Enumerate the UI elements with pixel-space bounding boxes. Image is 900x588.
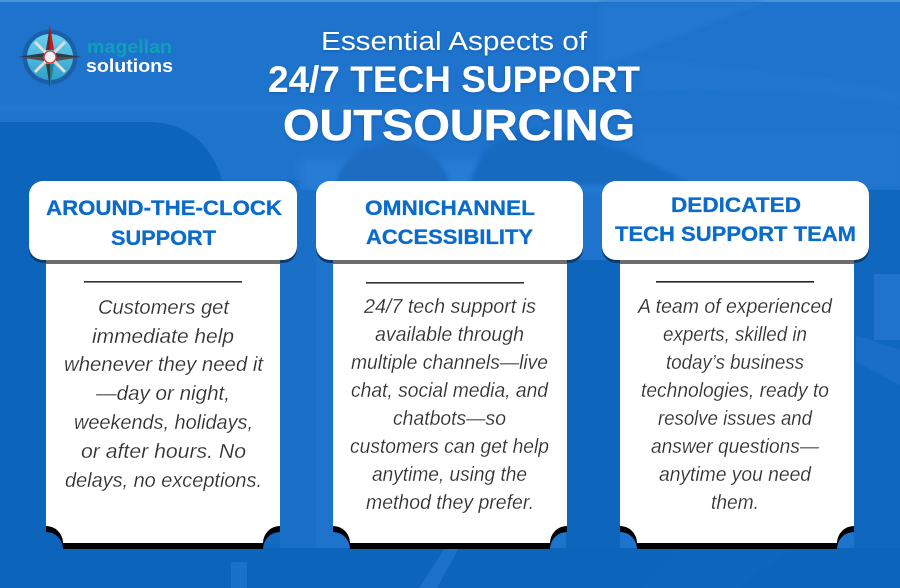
body text: weekends, holidays, — [74, 412, 253, 434]
divider — [656, 281, 814, 283]
heading: OMNICHANNEL — [365, 197, 535, 220]
logo wordmark: magellan — [87, 37, 172, 57]
icon: compass — [18, 25, 82, 88]
panel body — [333, 262, 567, 549]
body text: anytime, using the — [372, 464, 527, 486]
title — [268, 28, 640, 150]
heading: DEDICATED — [671, 194, 801, 217]
body text: Customers get — [98, 297, 230, 319]
body text: multiple channels—live — [351, 352, 548, 374]
logo: Magellan Solutions: solutions — [86, 56, 173, 76]
body text: resolve issues and — [658, 408, 813, 430]
body text: today’s business — [666, 352, 804, 374]
header card — [29, 181, 297, 260]
divider — [84, 281, 242, 283]
panel: omnichannel accessibility — [316, 181, 583, 549]
body text: A team of experienced — [637, 296, 833, 318]
heading: AROUND-THE-CLOCK — [46, 197, 282, 220]
heading: ACCESSIBILITY — [366, 226, 533, 249]
body text: delays, no exceptions. — [65, 470, 262, 492]
body text: available through — [375, 324, 524, 346]
body text: whenever they need it — [64, 354, 264, 376]
header card — [316, 181, 583, 260]
body text: chatbots—so — [393, 408, 506, 430]
body text: 24/7 tech support is — [363, 296, 536, 318]
header shadow — [29, 184, 297, 263]
body text: anytime you need — [659, 464, 812, 486]
body text: technologies, ready to — [641, 380, 829, 402]
body text: them. — [711, 492, 759, 514]
body text: chat, social media, and — [351, 380, 549, 402]
heading: TECH SUPPORT TEAM — [615, 223, 856, 246]
panel: around-the-clock support — [29, 181, 297, 549]
panel body — [46, 262, 280, 549]
body text: immediate help — [92, 326, 234, 348]
body text: answer questions— — [651, 436, 820, 458]
title line 3: OUTSOURCING — [283, 101, 635, 150]
title line 1: Essential Aspects of — [321, 28, 588, 56]
header card — [602, 181, 869, 260]
divider — [366, 282, 524, 284]
heading: SUPPORT — [111, 227, 216, 250]
body text: experts, skilled in — [663, 324, 807, 346]
header shadow — [316, 184, 583, 263]
panel body — [620, 262, 854, 549]
body text: or after hours. No — [81, 441, 246, 463]
panel: dedicated tech support team — [602, 181, 869, 549]
body text: method they prefer. — [366, 492, 534, 514]
body text: customers can get help — [350, 436, 549, 458]
title line 2: 24/7 TECH SUPPORT — [268, 58, 640, 100]
logo: Magellan Solutions — [18, 25, 173, 88]
body text: —day or night, — [95, 383, 230, 405]
header shadow — [602, 184, 869, 263]
